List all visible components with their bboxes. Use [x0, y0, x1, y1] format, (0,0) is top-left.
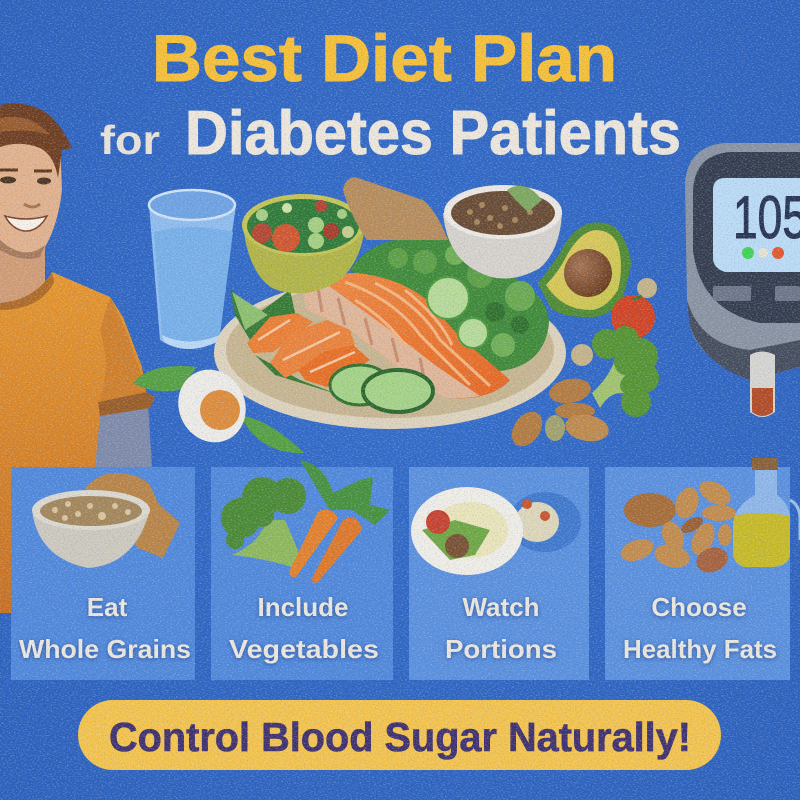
- panel: include vegetables: [211, 460, 393, 680]
- panel: choose healthy fats: Choose: [651, 592, 747, 622]
- face: [0, 140, 62, 257]
- smile: [5, 216, 47, 231]
- arm: [93, 405, 152, 467]
- main salmon fillet: [302, 273, 510, 398]
- person: [0, 104, 155, 613]
- banner: Control Blood Sugar Naturally!: [109, 714, 691, 760]
- icon: grain bowl and bread: [32, 473, 180, 568]
- neck: [0, 240, 45, 303]
- glucose meter: [685, 143, 800, 417]
- icon: nuts and oil bottle: [618, 458, 800, 577]
- almonds: [505, 376, 611, 452]
- salad bowl: [242, 194, 365, 293]
- eyes and brows: [0, 170, 52, 171]
- egg and leaves: [133, 359, 304, 453]
- title: [100, 21, 681, 168]
- avocado: [538, 222, 631, 317]
- cucumbers: [427, 277, 469, 319]
- title: Diabetes Patients: [185, 99, 681, 168]
- nose: [24, 204, 40, 207]
- title: for: [100, 117, 160, 163]
- broccoli: [592, 326, 659, 417]
- title: Best Diet Plan: [152, 21, 617, 95]
- tomato and nut: [571, 278, 657, 366]
- lentil bowl: [443, 185, 562, 279]
- panel: eat whole grains: Eat: [87, 592, 128, 622]
- small salmon slices: [247, 313, 313, 353]
- panel: choose healthy fats: [605, 458, 800, 680]
- panel: eat whole grains: Whole Grains: [19, 634, 191, 664]
- panel: choose healthy fats: Healthy Fats: [623, 634, 777, 664]
- icon: plates: [411, 487, 581, 575]
- icon: broccoli and carrots: [221, 460, 390, 583]
- panel: include vegetables: Vegetables: [229, 634, 379, 664]
- banner: [78, 700, 721, 770]
- salad leaves: [350, 233, 549, 372]
- hair: [0, 104, 72, 178]
- panel: include vegetables: Include: [257, 592, 349, 622]
- bread: [343, 177, 448, 240]
- panel: watch portions: Watch: [462, 592, 540, 622]
- water glass: [149, 190, 236, 349]
- panel: watch portions: Portions: [445, 634, 557, 664]
- panel: watch portions: [409, 467, 589, 680]
- shirt: [0, 272, 155, 613]
- panel: eat whole grains: [11, 467, 195, 680]
- plate of salmon: [214, 233, 566, 429]
